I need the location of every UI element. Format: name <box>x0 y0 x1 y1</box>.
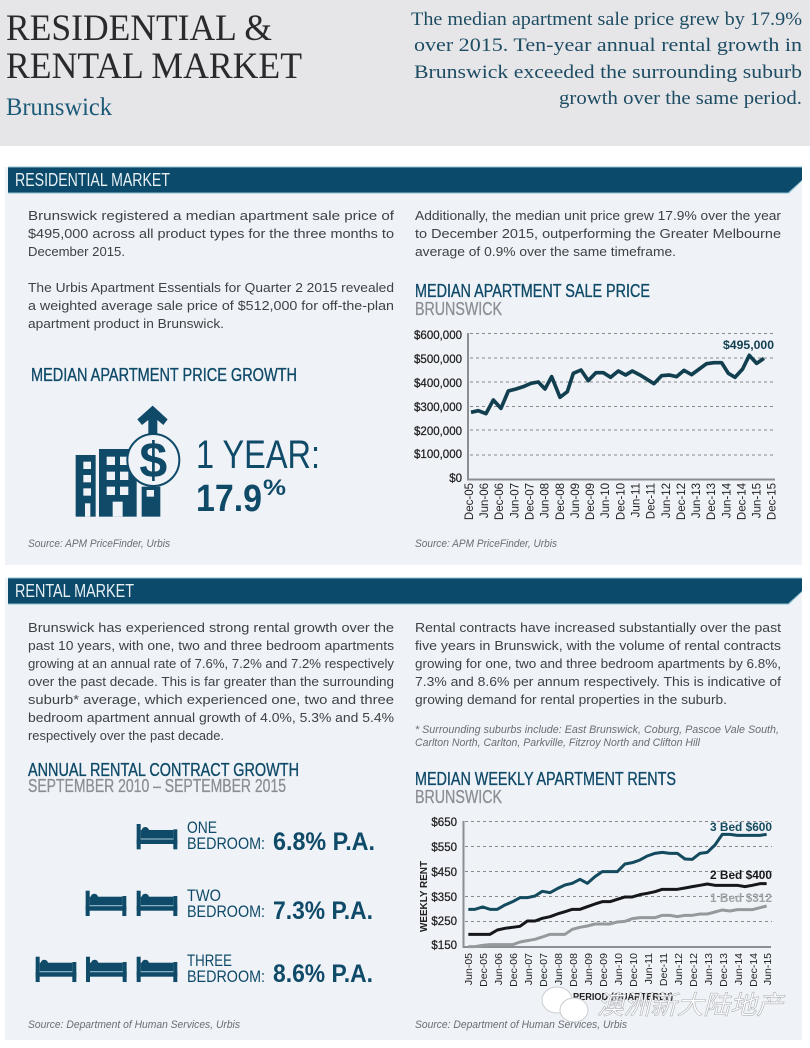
stat: one bedroom <box>137 818 375 856</box>
text block: rental growth: past 10 years, with one, two and three bedroom apartments <box>28 638 395 653</box>
line chart: median apartment sale price: Dec-09 <box>585 483 597 520</box>
line chart: median apartment sale price: Jun-06 <box>479 483 491 518</box>
line chart: median apartment sale price: Dec-06 <box>494 483 506 520</box>
icon: bed <box>137 824 177 849</box>
panel: rental market <box>5 578 802 1040</box>
source note: Source: Department of Human Services, Urbis <box>28 1019 240 1031</box>
panel: residential market <box>5 166 802 565</box>
text block: rental contracts: Rental contracts have increased substantially over the past <box>415 620 781 635</box>
heading: median apartment sale price: BRUNSWICK <box>415 299 502 319</box>
title: RENTAL MARKET <box>6 46 302 87</box>
text block: rental growth <box>28 620 395 743</box>
text block: unit price growth: average of 0.9% over the same timeframe. <box>415 244 676 259</box>
text block: rental growth: bedroom apartment annual growth of 4.0%, 5.3% and 5.4% <box>28 710 394 725</box>
icon: building with dollar and up arrow: $ <box>139 432 167 488</box>
line chart: median weekly apartment rents: $650 <box>431 817 457 829</box>
line chart: median weekly apartment rents: Dec-08 <box>568 953 580 987</box>
line chart: median weekly apartment rents: Dec-12 <box>688 953 700 987</box>
line chart: median apartment sale price: Jun-08 <box>540 483 552 518</box>
summary statement: Brunswick exceeded the surrounding suburb <box>414 62 802 83</box>
line chart: median weekly apartment rents: $550 <box>431 842 457 854</box>
text block: Brunswick median price: a weighted average sale price of $512,000 for off-the-plan <box>28 298 394 313</box>
text block: unit price growth <box>415 208 782 259</box>
stat: one year growth: % <box>263 475 286 500</box>
line chart: median apartment sale price <box>414 330 778 520</box>
heading: median apartment sale price: MEDIAN APARTMENT SALE PRICE <box>415 281 650 301</box>
title: RESIDENTIAL & <box>6 8 272 49</box>
line chart: median weekly apartment rents: Jun-06 <box>493 953 505 985</box>
icon: two beds <box>86 891 177 916</box>
line chart: median weekly apartment rents: Jun-08 <box>553 953 565 985</box>
text block: unit price growth: Additionally, the median unit price grew 17.9% over the year <box>415 208 782 223</box>
heading: median weekly apartment rents: MEDIAN WEEKLY APARTMENT RENTS <box>415 769 676 789</box>
line chart: median apartment sale price: Dec-05 <box>464 483 476 520</box>
text block: Brunswick median price: December 2015. <box>28 244 125 259</box>
heading: median weekly apartment rents: BRUNSWICK <box>415 787 502 807</box>
line chart: median apartment sale price: Dec-15 <box>766 483 778 520</box>
stat: one year growth: 17.9 <box>196 478 262 520</box>
icon: chat bubbles <box>542 987 588 1022</box>
footnote: * Surrounding suburbs include: East Brunswick, Coburg, Pascoe Vale South, <box>415 724 779 736</box>
footnote: Carlton North, Carlton, Parkville, Fitzroy North and Clifton Hill <box>415 737 701 749</box>
header band <box>0 0 810 146</box>
line chart: median weekly apartment rents: Dec-09 <box>598 953 610 987</box>
line chart: median apartment sale price: $0 <box>449 473 462 485</box>
line chart: median apartment sale price: Jun-07 <box>510 483 522 518</box>
stat: two bedroom <box>86 886 373 925</box>
heading: median weekly apartment rents <box>415 769 676 807</box>
series: 3 bed <box>468 834 767 909</box>
source note: Source: APM PriceFinder, Urbis <box>415 538 557 550</box>
stat: two bedroom: TWO <box>187 886 221 905</box>
data label: $495,000 <box>723 340 774 352</box>
heading: annual rental contract growth: ANNUAL RENTAL CONTRACT GROWTH <box>28 760 299 780</box>
line chart: median weekly apartment rents: Jun-11 <box>643 953 655 984</box>
line chart: median weekly apartment rents <box>418 817 774 1003</box>
stat: one bedroom: BEDROOM: <box>187 834 265 853</box>
summary statement: The median apartment sale price grew by 17.9% <box>411 9 802 30</box>
line chart: median weekly apartment rents: Dec-10 <box>628 953 640 987</box>
summary statement: growth over the same period. <box>559 88 802 109</box>
text block: Brunswick median price: The Urbis Apartment Essentials for Quarter 2 2015 revealed <box>28 280 394 295</box>
line chart: median apartment sale price: Jun-10 <box>600 483 612 518</box>
text block: rental contracts: 7.3% and 8.6% per annum respectively. This is indicative of <box>415 674 781 689</box>
heading: median apartment price growth: MEDIAN APARTMENT PRICE GROWTH <box>31 365 297 385</box>
footnote <box>415 724 779 749</box>
text block: rental contracts: growing for one, two and three bedroom apartments by 6.8%, <box>415 656 781 671</box>
line chart: median weekly apartment rents: Jun-09 <box>583 953 595 985</box>
source note: Source: Department of Human Services, Urbis <box>415 1019 627 1031</box>
text block: rental growth: respectively over the past decade. <box>28 728 224 743</box>
line chart: median apartment sale price: Jun-15 <box>752 483 764 518</box>
line chart: median apartment sale price: $600,000 <box>414 330 462 342</box>
line chart: median weekly apartment rents: Jun-13 <box>703 953 715 985</box>
line chart: median apartment sale price: Dec-11 <box>646 483 658 519</box>
stat: three bedroom: BEDROOM: <box>187 967 265 986</box>
stat: two bedroom: BEDROOM: <box>187 902 265 921</box>
summary statement: over 2015. Ten-year annual rental growth in <box>414 35 803 56</box>
line chart: median apartment sale price: Dec-14 <box>736 482 748 520</box>
summary statement <box>411 9 803 109</box>
watermark: 澳洲新大陆地产 <box>597 990 786 1020</box>
line chart: median weekly apartment rents: Dec-14 <box>748 953 760 987</box>
line chart: median weekly apartment rents: Jun-12 <box>673 953 685 985</box>
text block: rental contracts: growing demand for rental properties in the suburb. <box>415 692 727 707</box>
line chart: median apartment sale price: Jun-13 <box>691 483 703 518</box>
line chart: median apartment sale price: $500,000 <box>414 354 462 366</box>
line chart: median weekly apartment rents: Dec-06 <box>508 953 520 987</box>
stat: one year growth <box>196 433 320 520</box>
text block: rental contracts <box>415 620 782 707</box>
stat: three bedroom: 8.6% P.A. <box>273 960 373 988</box>
subtitle: Brunswick <box>6 94 112 121</box>
text block: rental growth: Brunswick has experienced strong rental growth over the <box>28 620 394 635</box>
text block: Brunswick median price: $495,000 across all product types for the three months to <box>28 226 394 241</box>
line chart: median weekly apartment rents: $250 <box>431 916 457 928</box>
line chart: median weekly apartment rents: $350 <box>431 892 457 904</box>
line chart: median weekly apartment rents: Jun-05 <box>463 953 475 985</box>
series: 2 bed <box>468 884 767 934</box>
line chart: median weekly apartment rents: Jun-07 <box>523 953 535 985</box>
line chart: median apartment sale price: Dec-12 <box>676 483 688 520</box>
watermark <box>542 987 786 1022</box>
text block: rental growth: suburb* average, which experienced one, two and three <box>28 692 394 707</box>
banner: residential market: RESIDENTIAL MARKET <box>15 170 170 190</box>
text block: Brunswick median price: apartment product in Brunswick. <box>28 316 224 331</box>
line chart: median weekly apartment rents: Dec-07 <box>538 953 550 987</box>
text block: rental growth: over the past decade. This is far greater than the surrounding <box>28 674 394 689</box>
line chart: median weekly apartment rents: Dec-13 <box>718 953 730 987</box>
line chart: median weekly apartment rents: Dec-05 <box>478 953 490 987</box>
icon: building with dollar and up arrow <box>76 406 179 517</box>
text block: Brunswick median price <box>28 208 394 331</box>
axis title: weekly rent: WEEKLY RENT <box>418 860 430 932</box>
heading: median apartment sale price <box>415 281 650 319</box>
line chart: median apartment sale price: Jun-14 <box>722 482 734 518</box>
banner: rental market <box>8 578 802 604</box>
stat: one bedroom: 6.8% P.A. <box>273 828 375 856</box>
line chart: median weekly apartment rents: Dec-11 <box>658 953 670 986</box>
source note: Source: APM PriceFinder, Urbis <box>28 538 170 550</box>
text block: unit price growth: to December 2015, outperforming the Greater Melbourne <box>415 226 781 241</box>
line chart: median apartment sale price: $200,000 <box>414 426 462 438</box>
stat: three bedroom: THREE <box>187 951 232 970</box>
line chart: median apartment sale price: Jun-09 <box>570 483 582 518</box>
line chart: median apartment sale price: $300,000 <box>414 402 462 414</box>
series label: 3 bed: 3 Bed $600 <box>710 820 772 834</box>
banner: rental market: RENTAL MARKET <box>15 581 134 601</box>
line chart: median weekly apartment rents: $150 <box>431 940 457 952</box>
title <box>6 8 302 87</box>
line chart: median weekly apartment rents: $450 <box>431 867 457 879</box>
line chart: median apartment sale price: Jun-11 <box>630 483 642 517</box>
stat: three bedroom <box>36 951 373 988</box>
line chart: median apartment sale price: $100,000 <box>414 449 462 461</box>
line chart: median weekly apartment rents: Jun-14 <box>733 953 745 985</box>
line chart: median apartment sale price: Dec-07 <box>524 483 536 520</box>
series label: 1 bed: 1 Bed $312 <box>710 891 772 905</box>
stat: one bedroom: ONE <box>187 818 217 837</box>
heading: annual rental contract growth: SEPTEMBER 2010 – SEPTEMBER 2015 <box>28 776 286 796</box>
line chart: median apartment sale price: Dec-08 <box>555 483 567 520</box>
line chart: median apartment sale price: Dec-13 <box>706 483 718 520</box>
text block: Brunswick median price: Brunswick registered a median apartment sale price of <box>28 208 394 223</box>
series label: 2 bed: 2 Bed $400 <box>710 868 772 882</box>
stat: one year growth: 1 YEAR: <box>196 433 320 477</box>
text block: rental growth: growing at an annual rate of 7.6%, 7.2% and 7.2% respectively <box>28 656 395 671</box>
icon: three beds <box>36 957 177 982</box>
heading: annual rental contract growth <box>28 760 299 796</box>
line chart: median apartment sale price: Jun-12 <box>661 483 673 518</box>
banner: residential market <box>8 166 802 194</box>
stat: two bedroom: 7.3% P.A. <box>273 897 373 925</box>
text block: rental contracts: five years in Brunswick, with the volume of rental contracts <box>415 638 782 653</box>
line chart: median apartment sale price: $400,000 <box>414 378 462 390</box>
series: 1 bed <box>468 906 767 947</box>
line chart: median apartment sale price: Dec-10 <box>616 483 628 520</box>
line chart: median weekly apartment rents: Jun-10 <box>613 953 625 985</box>
line chart: median weekly apartment rents: Jun-15 <box>762 953 774 985</box>
axis title: period: PERIOD (QUARTERLY) <box>573 991 673 1003</box>
